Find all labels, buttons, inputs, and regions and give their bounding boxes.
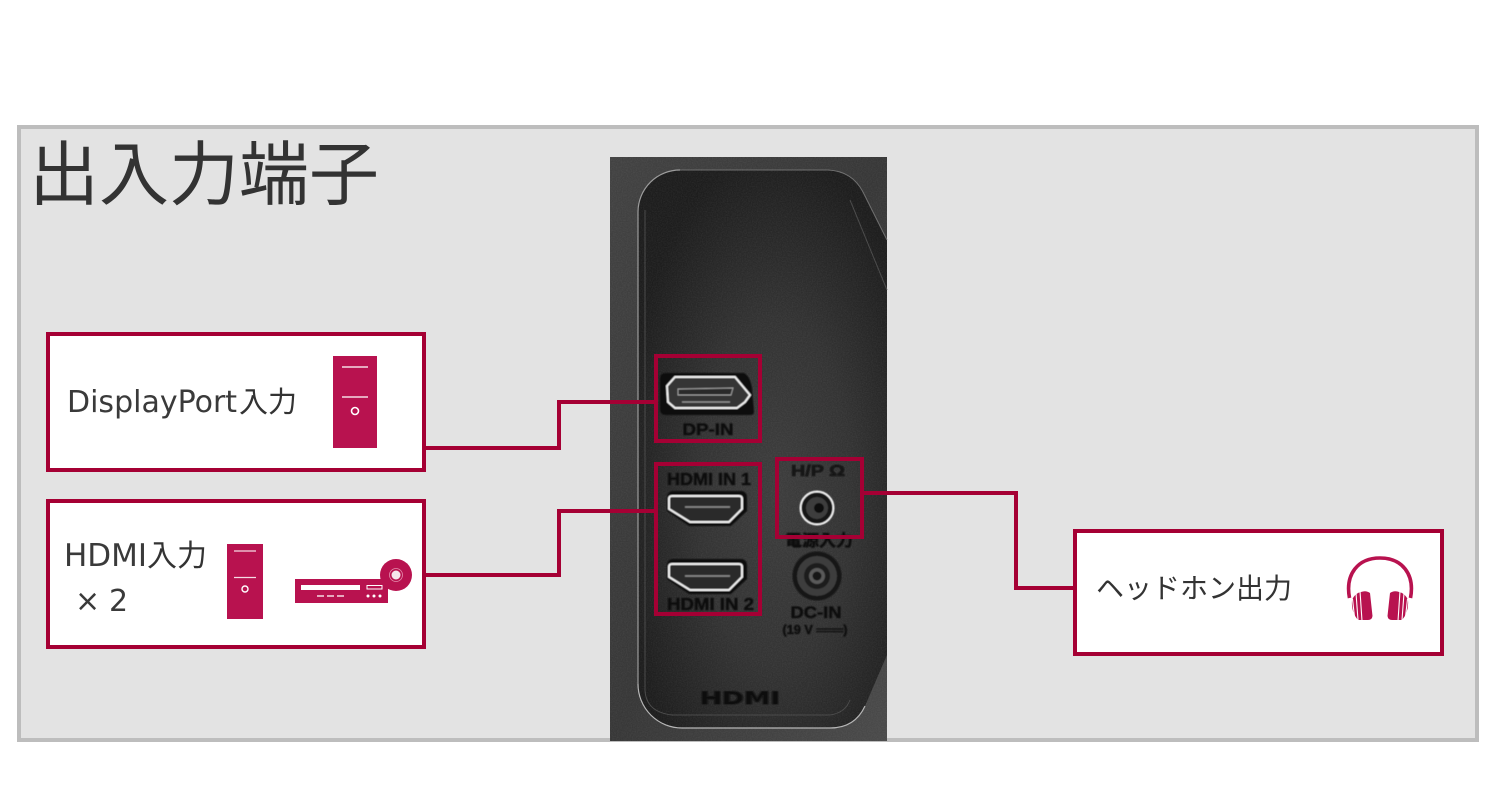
port: HDMI IN 2: [667, 559, 754, 614]
highlight: DP port box: [656, 356, 760, 441]
label: times 2: ×: [75, 584, 100, 619]
label: DisplayPort input: DisplayPort: [67, 385, 237, 420]
label: headphone output: ヘッドホン出力: [1096, 567, 1292, 607]
port: HDMI IN 1: [667, 469, 751, 526]
icon: headphones: [1349, 558, 1411, 621]
port: DC-IN: [782, 532, 853, 637]
label: HDMI IN 1: HDMI IN 1: [667, 469, 751, 489]
label: DP-IN: DP-IN: [682, 420, 734, 439]
icon: PC tower: [227, 544, 263, 619]
icon: disc player: [295, 559, 412, 603]
label: HDMI input: HDMI: [64, 538, 147, 574]
logo: HDMI embossed: HDMI: [700, 689, 780, 709]
label: HDMI input: 入力: [147, 531, 207, 575]
port: DC-IN: 電源入力: [785, 532, 853, 550]
photo: monitor rear port panel: [610, 157, 887, 741]
label: times 2: 2: [109, 584, 128, 619]
highlight: HDMI ports box: [656, 464, 760, 614]
connector: DisplayPort: [424, 402, 656, 448]
panel: headphone output: [1075, 531, 1442, 654]
title: 出入力端子: [29, 119, 379, 220]
panel: DisplayPort input: [48, 334, 424, 470]
panel: input/output terminals background: [19, 127, 1477, 740]
connector: headphone: [862, 493, 1075, 588]
highlight: headphone port box: [777, 459, 862, 537]
icon: PC tower: [333, 356, 377, 448]
label: DisplayPort input: 入力: [239, 379, 297, 421]
label: H/P: H/P Ω: [791, 463, 845, 480]
label: 19 V: (19 V ═══): [782, 623, 848, 637]
port: DisplayPort: [660, 373, 754, 439]
label: HDMI IN 2: HDMI IN 2: [667, 594, 754, 614]
port: headphone jack: [791, 463, 845, 524]
label: DC-IN: DC-IN: [790, 603, 842, 622]
connector: HDMI: [424, 511, 656, 575]
panel: HDMI input: [48, 501, 424, 647]
